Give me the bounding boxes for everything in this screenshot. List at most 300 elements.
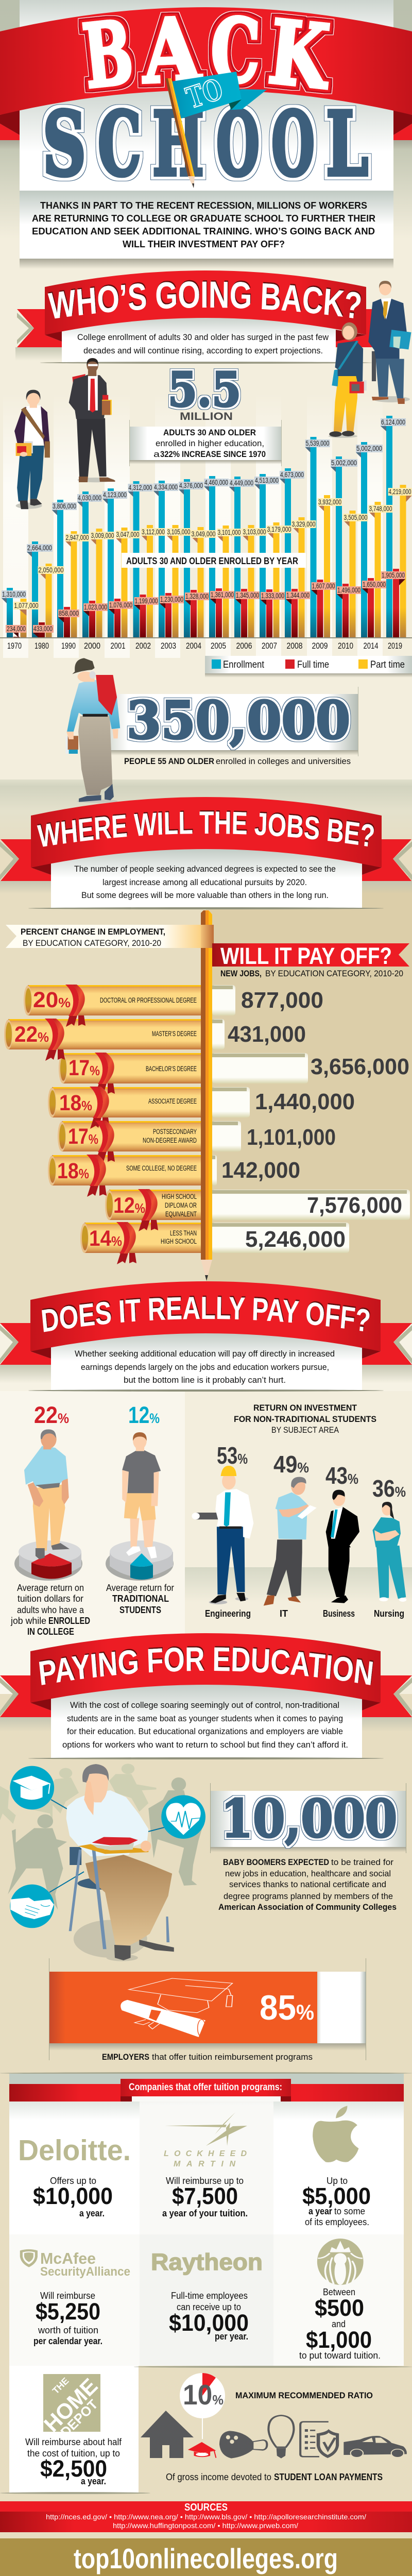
stats: return by subject: 53% <box>217 1442 248 1469</box>
title: SCHOOL: O <box>271 93 315 196</box>
panel: where will the jobs be text: But some degrees will be more valuable than others in the long run. <box>81 890 329 900</box>
labels: enrollment values: 3,806,000 <box>53 502 76 510</box>
company: Starbucks: $500 <box>315 2295 364 2321</box>
axis with year labels: 2007 <box>262 641 277 651</box>
labels: part time values: 3,329,000 <box>291 520 315 528</box>
figure: man in black suit with red backpack <box>69 358 115 482</box>
bars: enrollment <box>7 416 392 638</box>
caption: employers: EMPLOYERS <box>102 2052 149 2062</box>
percent labels: 22% <box>14 1022 49 1047</box>
icon: McAfee shield <box>20 2249 38 2267</box>
company: The Home Depot <box>25 2374 122 2486</box>
labels: full time values: 1,905,000 <box>382 571 405 579</box>
numbers: new jobs <box>221 988 409 1252</box>
education category labels <box>100 996 197 1245</box>
company: The Home Depot: the cost of tuition, up to <box>27 2448 120 2459</box>
intro text: ARE RETURNING TO COLLEGE OR GRADUATE SCHOOL TO FURTHER THEIR <box>32 213 375 224</box>
education category labels: DIPLOMA OR <box>165 1201 197 1209</box>
labels: full time values: 1,344,000 <box>286 591 310 599</box>
panel: does it really pay off text: but the bottom line is it probably can’t hurt. <box>124 1375 286 1385</box>
footer <box>0 2538 412 2576</box>
callout: adults 30 and older: 322% INCREASE SINCE 1970 <box>160 449 266 459</box>
chart: 10 percent recommended ratio <box>180 2373 373 2439</box>
panel: paying for education text: students are in the same boat as younger students when it comes to paying <box>67 1714 343 1723</box>
labels: part time values: 3,112,000 <box>142 528 165 536</box>
panel: paying for education text <box>0 1682 412 1759</box>
labels: part time values <box>13 488 412 616</box>
legend: Enrollment <box>223 659 265 670</box>
header panel <box>20 0 393 269</box>
icon: house <box>141 2411 194 2458</box>
axis with year labels: 2000 <box>84 641 100 651</box>
text: baby boomers: American Association of Community Colleges <box>218 1902 397 1912</box>
company: Lockheed Martin <box>162 2112 248 2218</box>
flag: TO: TO <box>182 72 227 115</box>
chart: 10 percent recommended ratio: 10% <box>183 2379 224 2411</box>
labels: full time values: 1,230,000 <box>160 596 183 603</box>
company: McAfee: worth of tuition <box>38 2325 98 2335</box>
captions: average return: STUDENTS <box>119 1605 161 1615</box>
panel: who's going back text: College enrollment of adults 30 and older has surged in the past few <box>77 332 329 342</box>
company: McAfee: per calendar year. <box>33 2336 102 2346</box>
figure: nurse <box>372 1502 406 1602</box>
labels: enrollment values: 4,513,000 <box>255 477 279 484</box>
company: Apple: of its employees. <box>305 2217 369 2227</box>
labels: enrollment values: 2,664,000 <box>27 544 52 552</box>
labels: subject areas: IT <box>280 1608 288 1619</box>
figure: woman with yellow pants <box>329 323 367 438</box>
axis with year labels: 2004 <box>186 641 201 651</box>
labels: full time values: 1,328,000 <box>185 592 209 600</box>
icon: pencil flagpole <box>165 78 195 188</box>
banner: percent change in employment <box>6 925 214 948</box>
panel: does it really pay off text: earnings depends largely on the jobs and education workers pursue, <box>81 1362 329 1372</box>
figure: man in light blue shirt <box>24 1429 70 1560</box>
icon: graduation cap and diploma <box>121 1978 233 2037</box>
sources <box>0 2501 412 2532</box>
labels: enrollment values: 4,312,000 <box>129 484 152 492</box>
education category labels: DOCTORAL OR PROFESSIONAL DEGREE <box>100 996 197 1004</box>
education category labels: ASSOCIATE DEGREE <box>148 1097 197 1105</box>
axis with year labels: 2009 <box>312 641 328 651</box>
company: Starbucks: and <box>332 2319 346 2329</box>
figure: business person <box>326 1490 359 1603</box>
education category labels: BACHELOR’S DEGREE <box>146 1065 197 1073</box>
panel: paying for education text: With the cost of college soaring seemingly out of control, non-traditional <box>70 1700 339 1710</box>
labels: enrollment values: 6,124,000 <box>381 418 405 426</box>
numbers: new jobs: 1,440,000 <box>255 1089 355 1114</box>
axis with year labels: 2010 <box>338 641 353 651</box>
labels: part time values: 3,047,000 <box>116 531 139 538</box>
heading: return on investment: FOR NON-TRADITIONAL STUDENTS <box>234 1414 376 1424</box>
axis with year labels: 2006 <box>236 641 252 651</box>
labels: full time values: 1,361,000 <box>211 591 234 599</box>
company: Starbucks: Between <box>323 2287 355 2297</box>
chart title band: ADULTS 30 AND OLDER ENROLLED BY YEAR <box>126 556 298 566</box>
labels: enrollment values: 4,376,000 <box>179 482 203 489</box>
labels: subject areas: Nursing <box>374 1608 404 1619</box>
callout: adults 30 and older: ADULTS 30 AND OLDER <box>163 428 256 437</box>
caption: student loan payments: Of gross income devoted to <box>166 2472 271 2482</box>
caption: people 55 and older: enrolled in colleges and universities <box>216 756 351 766</box>
figure: woman in purple jacket <box>14 390 50 509</box>
banner: 350,000: 350,000 <box>127 690 350 751</box>
company: McAfee <box>20 2249 130 2346</box>
axis with year labels: 1980 <box>35 641 49 651</box>
labels: subject areas: Engineering <box>205 1608 251 1619</box>
labels: enrollment values: 1,310,000 <box>2 590 26 598</box>
banner: 85 percent <box>49 1958 366 2060</box>
panel: does it really pay off text: Whether seeking additional education will pay off directly in increased <box>75 1349 335 1359</box>
education category labels: EQUIVALENT <box>165 1210 197 1218</box>
figure: IT worker <box>264 1477 317 1606</box>
axis with year labels: 2008 <box>286 641 303 651</box>
percent labels: 18% <box>57 1159 89 1183</box>
icon: vertical pencil <box>201 910 212 1281</box>
caption: people 55 and older <box>124 756 351 766</box>
company: The Home Depot: Will reimburse about half <box>25 2437 122 2447</box>
title: SCHOOL: L <box>326 93 368 196</box>
ribbon: who's going back <box>17 270 372 347</box>
caption: employers: that offer tuition reimbursement programs <box>152 2052 313 2062</box>
icon: Lockheed star <box>165 2112 247 2146</box>
panel: where will the jobs be text: The number of people seeking advanced degrees is expected to see the <box>74 864 336 874</box>
labels: full time values <box>6 571 405 638</box>
company: Raytheon: Full-time employees <box>171 2291 248 2301</box>
labels: part time values: 1,077,000 <box>14 602 38 609</box>
connector lines <box>49 1800 164 1892</box>
logo: Home Depot: HOME <box>39 2374 102 2436</box>
numbers: new jobs: 3,656,000 <box>311 1054 409 1079</box>
title: BACK <box>79 0 335 109</box>
percent labels <box>14 988 145 1251</box>
labels: enrollment values: 5,002,000 <box>331 459 357 467</box>
company: Starbucks: to put toward tuition. <box>299 2350 381 2361</box>
company: Lockheed Martin: a year of your tuition. <box>162 2208 248 2218</box>
axis with year labels: 2014 <box>364 641 378 651</box>
education category labels: SOME COLLEGE, NO DEGREE <box>126 1164 197 1172</box>
panel: where will the jobs be text <box>0 848 412 909</box>
callout: adults 30 and older: enrolled in higher education, <box>156 438 264 448</box>
panel: companies grid <box>0 2072 412 2494</box>
sources: http://www.huffingtonpost.com/ • http://www.prweb.com/ <box>113 2521 298 2530</box>
numbers: new jobs: 431,000 <box>228 1022 306 1047</box>
stat: 5.5 million: MILLION <box>180 411 233 422</box>
percent labels: 17% <box>68 1056 100 1080</box>
labels: enrollment values: 5,002,000 <box>356 445 382 452</box>
captions: average return: ENROLLED <box>48 1616 90 1626</box>
numbers: new jobs: 5,246,000 <box>245 1227 346 1252</box>
sources: http://nces.ed.gov/ • http://www.nea.org/ • http://www.bls.gov/ • http://apolloresearchinstitute.com/ <box>46 2513 366 2521</box>
education category labels: MASTER’S DEGREE <box>152 1030 197 1038</box>
panel: paying for education text: for their education. But educational organizations and employers are viable <box>67 1726 343 1736</box>
icon: light bulb <box>268 2415 294 2459</box>
company: Apple: to some <box>334 2206 365 2216</box>
percent labels: 20% <box>33 988 71 1012</box>
icon: handshake circle <box>10 1885 54 1928</box>
scrolls: new jobs by education category <box>212 985 410 1253</box>
numbers: new jobs: 877,000 <box>241 988 323 1013</box>
company: Apple: Up to <box>327 2176 348 2186</box>
intro text: THANKS IN PART TO THE RECENT RECESSION, MILLIONS OF WORKERS <box>40 200 367 211</box>
company: Lockheed Martin: LOCKHEED <box>164 2149 247 2158</box>
labels: full time values: 433,000 <box>33 625 53 633</box>
text: baby boomers <box>218 1857 397 1912</box>
labels: part time values: 3,105,000 <box>167 528 191 536</box>
company: Apple: a year <box>308 2206 332 2216</box>
title: BACK: A <box>140 0 203 104</box>
company: McAfee: $5,250 <box>36 2298 100 2325</box>
panel: paying for education text: options for workers who want to return to school but find they can’t afford it. <box>62 1740 348 1750</box>
stats: return by subject: 36% <box>372 1475 406 1502</box>
company: Deloitte: Deloitte. <box>18 2134 131 2167</box>
captions: average return: TRADITIONAL <box>112 1594 169 1604</box>
company: Lockheed Martin: Will reimburse up to <box>166 2176 244 2186</box>
stat: 12 percent: 12% <box>128 1402 160 1428</box>
panel: does it really pay off text <box>0 1332 412 1392</box>
company: Raytheon: Raytheon <box>151 2249 263 2275</box>
chart: adults 30 and older enrolled by year <box>0 416 412 677</box>
education category labels: NON-DEGREE AWARD <box>143 1137 197 1144</box>
company: Raytheon: can receive up to <box>177 2302 241 2312</box>
text: baby boomers: degree programs planned by members of the <box>224 1891 393 1901</box>
caption: people 55 and older: PEOPLE 55 AND OLDER <box>124 756 214 766</box>
company: McAfee: Will reimburse <box>40 2291 95 2301</box>
labels: enrollment values: 5,539,000 <box>306 439 330 447</box>
labels: enrollment values: 4,123,000 <box>103 491 127 499</box>
education category labels: POSTSECONDARY <box>153 1128 197 1136</box>
company: Deloitte: a year. <box>79 2208 105 2218</box>
icon: Apple logo <box>313 2106 358 2162</box>
company: Raytheon <box>151 2249 263 2342</box>
labels: part time values: 3,505,000 <box>344 514 368 521</box>
text: baby boomers: new jobs in education, healthcare and social <box>225 1869 391 1878</box>
legend: Part time <box>370 659 405 670</box>
labels: full time values: 1,199,000 <box>135 597 158 605</box>
icon: red graduation cap <box>188 2442 216 2458</box>
figure: engineer <box>192 1466 253 1604</box>
chart title band <box>122 553 306 568</box>
legend <box>205 656 412 677</box>
company: Starbucks: $1,000 <box>306 2327 372 2353</box>
scroll ribbons <box>45 985 158 1264</box>
icon: Starbucks logo <box>317 2239 364 2285</box>
captions: average return: Average return on <box>17 1583 84 1593</box>
title: BACK: B <box>79 1 138 109</box>
axis with year labels: 2005 <box>211 641 226 651</box>
company: Deloitte <box>18 2134 131 2218</box>
panel: who's going back text: decades and will continue rising, according to expert projections. <box>83 346 323 355</box>
labels: part time values: 3,179,000 <box>267 526 291 533</box>
chart: pie pedestal 22 percent <box>14 1540 82 1581</box>
stats: return by subject: 49% <box>273 1451 309 1478</box>
figure: seated older student <box>66 1764 174 1961</box>
figure: man in blue suit <box>368 281 411 404</box>
banner: 85 percent: 85% <box>260 1988 314 2027</box>
captions: average return: Average return for <box>106 1583 174 1593</box>
classroom silhouettes <box>0 1764 205 1910</box>
labels: full time values: 1,496,000 <box>337 586 360 594</box>
heading: return on investment <box>234 1403 376 1435</box>
panel: where will the jobs be text: largest increase among all educational pursuits by 2020. <box>102 877 307 887</box>
stat: 5.5 million: 5.5 <box>168 362 241 417</box>
company: Apple <box>302 2106 371 2227</box>
labels: full time values: 234,000 <box>7 625 26 633</box>
company: Raytheon: $10,000 <box>169 2310 249 2336</box>
icon: heart with pulse circle <box>161 1795 205 1839</box>
scrolls: percent change in employment <box>4 985 201 1253</box>
labels: full time values: 1,076,000 <box>109 601 132 609</box>
logo: Home Depot: THE <box>50 2376 71 2396</box>
education category labels: HIGH SCHOOL <box>161 1238 197 1245</box>
bars: part time <box>21 485 406 638</box>
labels: full time values: 1,023,000 <box>84 603 107 611</box>
labels: full time values: 858,000 <box>59 609 79 617</box>
company: The Home Depot: $2,500 <box>40 2455 107 2482</box>
captions: average return: IN COLLEGE <box>27 1626 74 1637</box>
labels: subject areas <box>205 1608 404 1619</box>
chart column stripes <box>3 393 383 658</box>
title: SCHOOL: H <box>152 93 204 196</box>
company: McAfee: SecurityAlliance <box>40 2265 130 2279</box>
company: Deloitte: $10,000 <box>33 2183 113 2209</box>
caption: student loan payments <box>166 2472 383 2482</box>
caption: student loan payments: STUDENT LOAN PAYMENTS <box>274 2472 383 2482</box>
icon: car <box>344 2436 407 2458</box>
text: baby boomers: services thanks to national certificate and <box>229 1879 386 1889</box>
labels: part time values: 3,748,000 <box>369 505 392 513</box>
icon: chicken leg <box>219 2431 268 2459</box>
percent labels: 14% <box>89 1226 122 1251</box>
captions: average return <box>10 1583 174 1637</box>
labels: full time values: 1,650,000 <box>363 581 386 588</box>
captions: average return: tuition dollars for <box>18 1594 83 1604</box>
labels: enrollment values <box>2 418 406 603</box>
title: SCHOOL: S <box>43 93 86 196</box>
ribbon: paying for education: PAYING FOR EDUCATION <box>39 1646 374 1685</box>
heading: companies that offer tuition programs: Companies that offer tuition programs: <box>129 2082 282 2093</box>
company: Lockheed Martin: MARTIN <box>174 2160 235 2168</box>
labels: full time values: 1,345,000 <box>236 591 259 599</box>
icon: graduation cap circle <box>10 1766 54 1809</box>
labels: part time values: 3,049,000 <box>192 530 215 538</box>
labels: part time values: 2,947,000 <box>66 534 89 541</box>
ribbon: where will the jobs be <box>0 797 412 881</box>
numbers: new jobs: 142,000 <box>221 1158 300 1183</box>
title: SCHOOL: O <box>216 93 260 196</box>
callout: adults 30 and older: a <box>153 449 160 459</box>
heading: return on investment: RETURN ON INVESTMENT <box>253 1403 357 1413</box>
logo: Home Depot: DEPOT <box>57 2396 101 2440</box>
title: SCHOOL: C <box>98 93 141 196</box>
labels: part time values: 3,103,000 <box>243 528 266 536</box>
captions: average return: job while <box>10 1616 46 1626</box>
labels: enrollment values: 4,334,000 <box>154 483 178 491</box>
labels: enrollment values: 4,030,000 <box>78 494 101 502</box>
banner: percent change in employment: PERCENT CHANGE IN EMPLOYMENT, <box>21 927 165 937</box>
text: baby boomers: to be trained for <box>331 1857 393 1867</box>
company: Raytheon: per year. <box>215 2331 248 2342</box>
company: Starbucks <box>299 2239 381 2361</box>
intro text: EDUCATION AND SEEK ADDITIONAL TRAINING. WHO’S GOING BACK AND <box>32 226 375 236</box>
labels: enrollment values: 4,460,000 <box>204 479 228 486</box>
captions: average return: adults who have a <box>17 1605 84 1615</box>
title: BACK: C <box>209 0 262 104</box>
ribbon: does it really pay off <box>0 1281 412 1365</box>
legend: Full time <box>297 659 329 670</box>
title: BACK: K <box>264 1 335 109</box>
figure: older man with hat and backpack <box>66 658 120 803</box>
labels: full time values: 1,333,000 <box>261 592 284 600</box>
percent labels: 12% <box>113 1193 145 1218</box>
education category labels: LESS THAN <box>170 1229 197 1237</box>
ribbon: who's going back: WHO’S GOING BACK? <box>47 280 362 318</box>
company: McAfee: McAfee <box>40 2249 96 2267</box>
axis with year labels: 2001 <box>110 641 126 651</box>
education category labels: HIGH SCHOOL <box>162 1193 197 1200</box>
axis with year labels: 2002 <box>135 641 151 651</box>
subhead: new jobs: NEW JOBS, <box>220 969 262 978</box>
figure: young man in grey t-shirt <box>122 1432 161 1558</box>
labels: enrollment values: 4,449,000 <box>230 479 253 487</box>
numbers: new jobs: 1,101,000 <box>247 1125 336 1150</box>
company: Apple: $5,000 <box>302 2183 371 2209</box>
text: baby boomers: BABY BOOMERS EXPECTED <box>223 1857 329 1867</box>
ribbon: does it really pay off: DOES IT REALLY PAY OFF? <box>42 1295 370 1332</box>
company: Lockheed Martin: $7,500 <box>172 2183 238 2209</box>
labels: part time values: 2,050,000 <box>38 566 64 574</box>
labels: subject areas: Business <box>323 1608 355 1619</box>
footer: top10onlinecolleges.org <box>74 2543 338 2574</box>
company: The Home Depot: a year. <box>81 2476 106 2486</box>
heading: companies that offer tuition programs <box>9 2079 404 2102</box>
bars: full time <box>13 569 399 638</box>
percent labels: 17% <box>68 1124 98 1149</box>
stats: return by subject: 43% <box>325 1462 358 1489</box>
chart: 10 percent recommended ratio: MAXIMUM RECOMMENDED RATIO <box>235 2391 373 2400</box>
flag: TO <box>172 72 267 118</box>
title: SCHOOL <box>43 93 368 196</box>
axis with year labels <box>0 637 412 651</box>
labels: part time values: 3,009,000 <box>91 532 114 539</box>
stat: 22 percent: 22% <box>34 1402 69 1428</box>
callout: adults 30 and older <box>129 420 282 466</box>
heading: return on investment: BY SUBJECT AREA <box>271 1425 339 1435</box>
company: Deloitte: Offers up to <box>50 2176 96 2186</box>
top ribbon <box>0 7 412 149</box>
labels: full time values: 1,607,000 <box>312 582 335 590</box>
labels: enrollment values: 4,673,000 <box>280 471 304 479</box>
percent labels: 18% <box>59 1091 92 1115</box>
stats: return by subject <box>217 1442 406 1502</box>
icon: checklist and shield <box>300 2422 339 2458</box>
labels: part time values: 3,101,000 <box>217 529 241 536</box>
intro text: WILL THEIR INVESTMENT PAY OFF? <box>123 239 285 249</box>
panel: who's going back text <box>15 314 372 364</box>
banner: percent change in employment: BY EDUCATION CATEGORY, 2010-20 <box>23 938 161 948</box>
labels: part time values: 3,932,000 <box>318 498 341 506</box>
axis with year labels: 1990 <box>61 641 76 651</box>
axis with year labels: 1970 <box>7 641 22 651</box>
intro text <box>32 200 375 249</box>
sources: SOURCES <box>184 2502 228 2513</box>
numbers: new jobs: 7,576,000 <box>307 1193 402 1218</box>
ribbon: where will the jobs be: WHERE WILL THE JOBS BE? <box>37 810 375 847</box>
axis with year labels: 2019 <box>388 641 402 651</box>
chart: pie pedestal 12 percent <box>106 1540 174 1581</box>
ribbon: paying for education <box>0 1633 412 1717</box>
axis with year labels: 2003 <box>161 641 176 651</box>
